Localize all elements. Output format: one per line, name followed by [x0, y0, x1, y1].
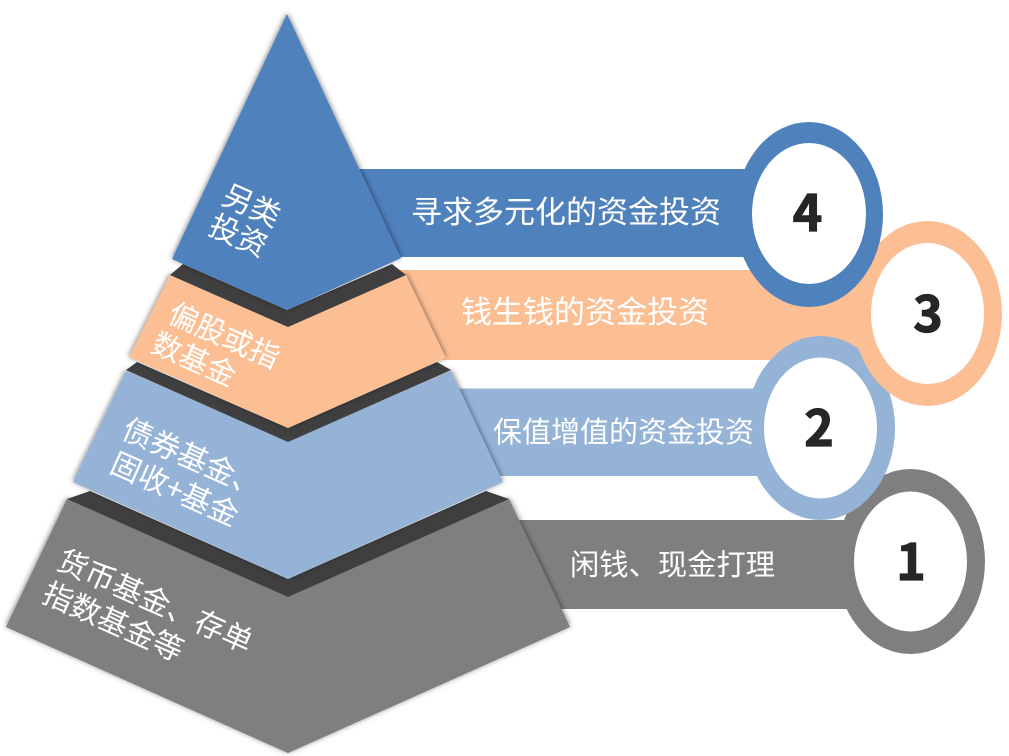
- ring 3: 3: [913, 275, 943, 347]
- dark band under tier 2: [67, 491, 509, 597]
- tier 2 label: [102, 405, 271, 539]
- tier 3 label: [146, 290, 287, 408]
- banner 2 text: 保值增值的资金投资: [493, 409, 754, 451]
- banner 4 text: 寻求多元化的资金投资: [411, 187, 721, 232]
- ring 3: [853, 221, 1002, 406]
- dark band under tier 3: [126, 362, 451, 442]
- ring 1: [836, 469, 985, 654]
- tier 4 label: 投资: [203, 201, 276, 266]
- pyramid tier 4: blue top: [172, 14, 401, 310]
- banner 1: idle cash: [500, 469, 985, 654]
- pyramid tier 1: grey base: [6, 499, 570, 753]
- tier 3 label: 数基金: [146, 321, 244, 395]
- tier 3 label: 偏股或指: [162, 291, 287, 377]
- ring 1: 1: [896, 523, 926, 595]
- banner 4: diversified investment: [350, 122, 883, 307]
- banner 2: capital preservation: [450, 336, 895, 520]
- pyramid tier 2: light blue: [73, 371, 503, 579]
- tier 2 label: 债券基金、: [116, 405, 271, 506]
- ring 4: 4: [793, 174, 822, 246]
- banner 3 text: 钱生钱的资金投资: [461, 287, 709, 332]
- dark band under tier 4: [170, 264, 406, 327]
- tier 1 label: 货币基金、存单: [51, 536, 261, 662]
- ring 4: [735, 122, 883, 307]
- tier 4 label: 另类: [216, 171, 289, 236]
- banner 1 text: 闲钱、现金打理: [570, 542, 775, 584]
- ring 2: 2: [804, 389, 834, 461]
- tier 1 label: 指数基金等: [37, 569, 192, 670]
- banner 3 bar: [390, 270, 910, 360]
- banner 3: money making money: [461, 221, 1002, 406]
- pyramid tier 3: peach: [129, 275, 446, 428]
- tier 4 label: [203, 171, 289, 266]
- ring 2: [746, 336, 895, 520]
- tier 2 label: 固收+基金: [104, 439, 247, 535]
